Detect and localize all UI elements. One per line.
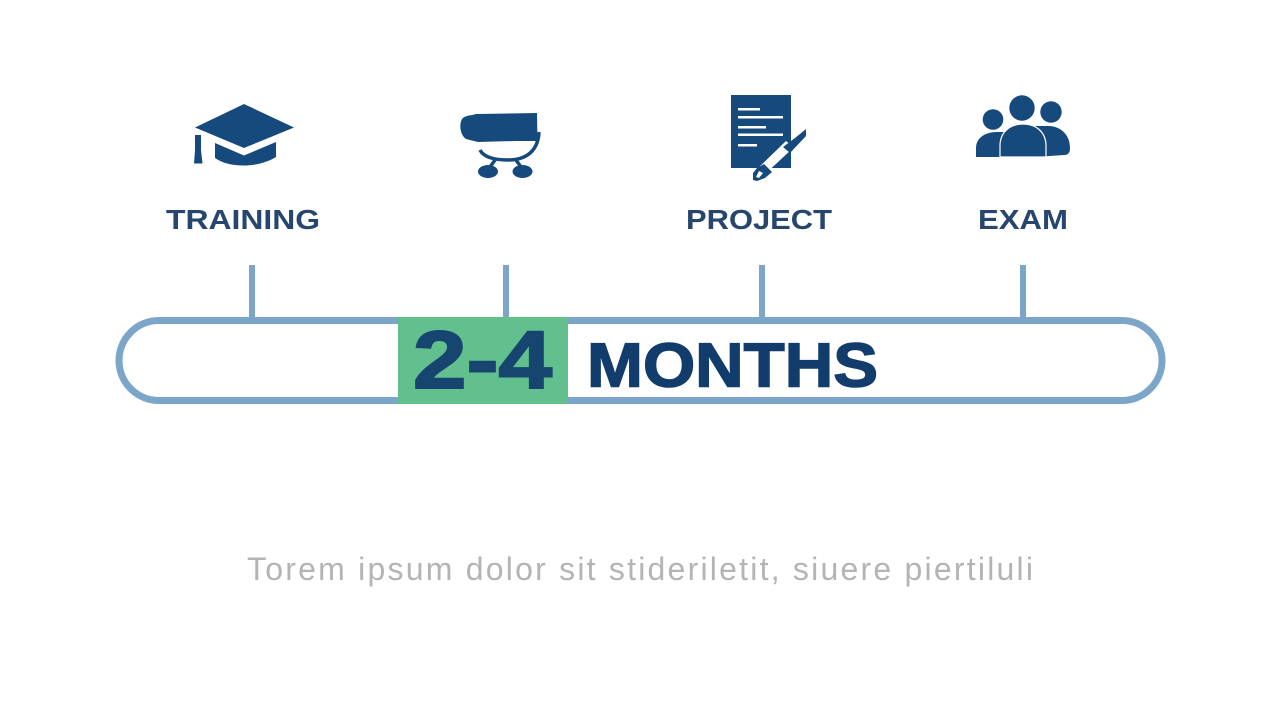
duration unit: MONTHS xyxy=(587,332,878,400)
timeline track xyxy=(119,320,1162,400)
caption: Torem ipsum dolor sit stideriletit, siuere piertiluli xyxy=(247,551,1033,587)
duration number: 2-4 xyxy=(413,315,552,406)
timeline connector ticks xyxy=(249,265,1026,320)
icon: unclear device xyxy=(460,113,539,178)
icon: graduation cap xyxy=(194,104,294,166)
label: training: TRAINING xyxy=(166,204,320,235)
label: project: PROJECT xyxy=(686,204,832,235)
icon: group of people xyxy=(976,95,1070,157)
label: exam: EXAM xyxy=(978,204,1068,235)
icon: document and pen xyxy=(731,95,806,181)
green highlight block xyxy=(398,317,568,404)
